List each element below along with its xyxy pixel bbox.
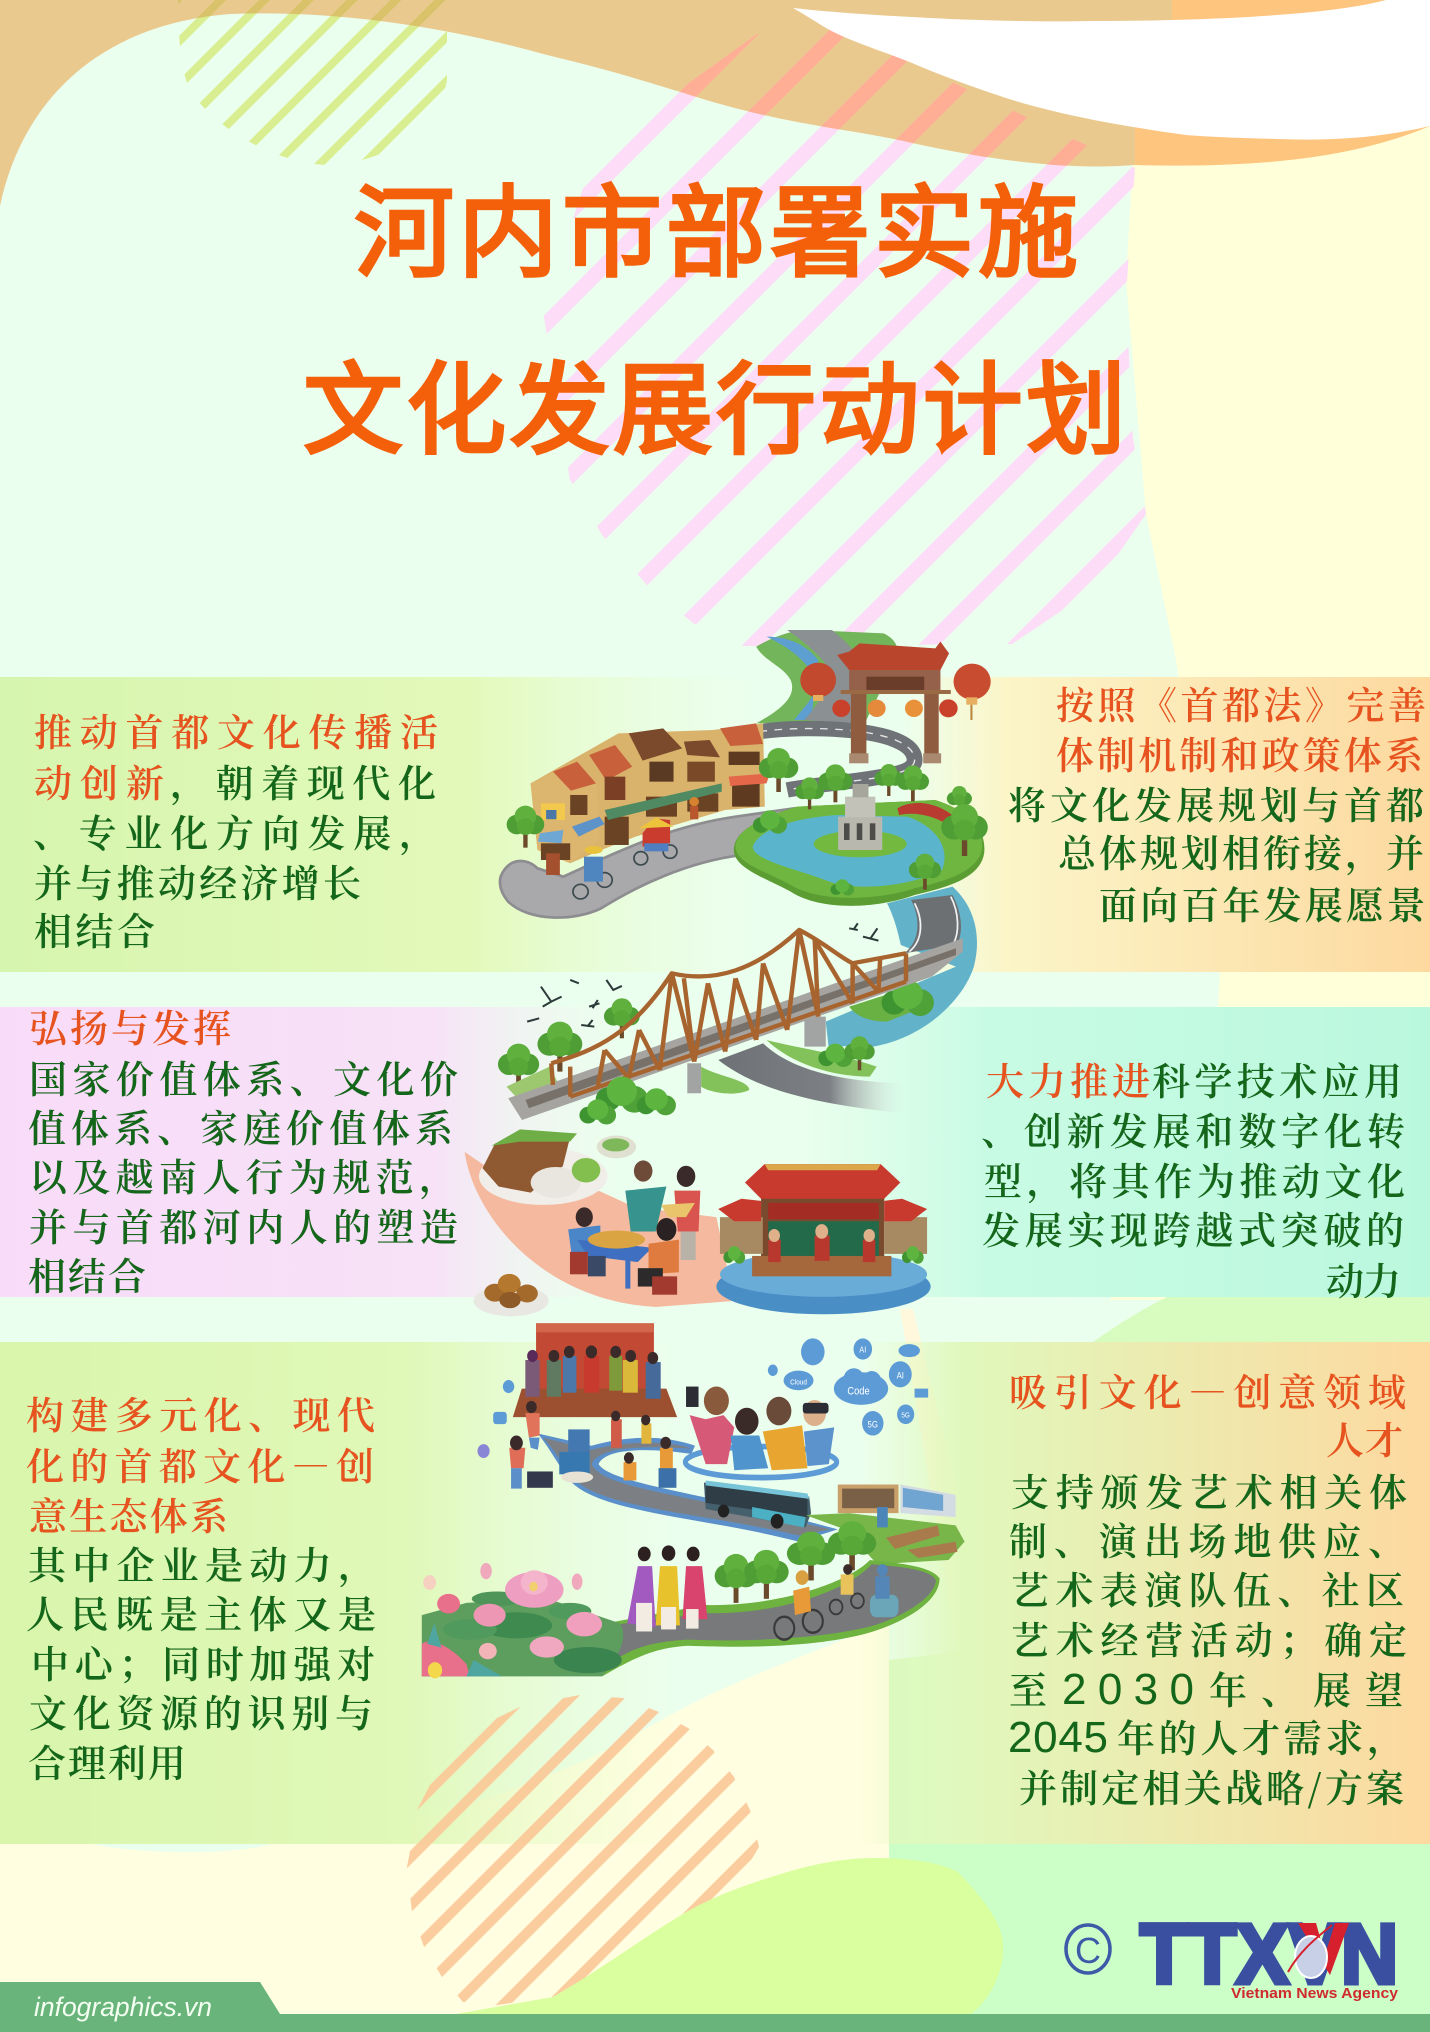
panel: promote cultural communication <box>0 677 760 972</box>
body text: cultural and creative talent: 年、展望 <box>1209 1660 1403 1715</box>
women in ao dai <box>627 1545 707 1631</box>
dancing children and tablets <box>509 1401 676 1489</box>
body text: promote national values: 相结合 <box>28 1246 146 1301</box>
hoan kiem lake with turtle tower <box>734 764 988 906</box>
long bien bridge <box>508 930 963 1120</box>
technology labels: 5G <box>868 1419 878 1430</box>
body text: promote cultural communication <box>33 753 437 956</box>
body text: science and technology: 发展实现跨越式突破的 <box>982 1200 1404 1255</box>
performance stage <box>513 1323 677 1417</box>
bridge piers <box>687 1017 826 1093</box>
body text: science and technology: 、创新发展和数字化转 <box>981 1101 1405 1156</box>
heading: capital law and institutions: 按照《首都法》完善 <box>1056 675 1426 730</box>
heading: promote cultural communication: 推动首都文化传播活 <box>34 702 438 757</box>
technology labels: AI <box>859 1345 866 1354</box>
lower road surface <box>609 1564 936 1664</box>
title: 河内市部署实施 <box>354 152 1078 297</box>
body text: science and technology: 型，将其作为推动文化 <box>984 1151 1405 1206</box>
body text: promote cultural communication: 相结合 <box>34 901 155 956</box>
panel: creative ecosystem <box>0 1342 680 1844</box>
body text: cultural and creative talent <box>1008 1462 1407 1813</box>
TTXVN wordmark: TTXVN <box>1140 1907 1398 2001</box>
river and road below lake <box>826 887 977 1047</box>
lotus flowers and leaves <box>422 1563 623 1678</box>
loop road <box>760 729 915 790</box>
cyclists and motorbike <box>774 1564 899 1640</box>
red V and globe <box>1288 1923 1349 1978</box>
peach food swoosh <box>465 1152 734 1307</box>
heading: creative ecosystem <box>26 1385 375 1541</box>
footer bar with infographics.vn tab <box>0 1982 1430 2032</box>
memorial gate with lanterns <box>800 642 991 763</box>
trees along road <box>715 1521 876 1603</box>
road and hill behind gate <box>756 630 897 723</box>
title <box>303 152 1126 474</box>
body text: creative ecosystem <box>26 1535 376 1788</box>
body text: cultural and creative talent: 艺术表演队伍、社区 <box>1011 1560 1404 1615</box>
illustration: old quarter, lake and long bien bridge <box>498 630 991 1124</box>
heading: capital law and institutions: 体制机制和政策体系 <box>1056 725 1423 780</box>
bushes below bridge <box>579 1077 676 1124</box>
body text: promote national values: 值体系、家庭价值体系 <box>28 1098 453 1153</box>
technology icons and cloud <box>477 1338 928 1458</box>
technology labels: AI <box>897 1370 904 1381</box>
body text: cultural and creative talent: 至 <box>1009 1660 1047 1715</box>
body text: promote cultural communication: ，朝着现代化 <box>170 753 436 808</box>
title: 文化发展行动计划 <box>303 329 1126 474</box>
riverside greenery <box>498 980 934 1103</box>
body text: science and technology: 动力 <box>1326 1251 1401 1306</box>
electric bus <box>704 1480 811 1529</box>
heading: creative ecosystem: 构建多元化、现代 <box>26 1385 375 1440</box>
panel: promote national values <box>0 998 620 1301</box>
body text: promote cultural communication: 、专业化方向发展， <box>33 803 437 858</box>
heading: promote cultural communication: 动创新 <box>34 753 164 808</box>
technology labels <box>790 1345 910 1430</box>
body text: cultural and creative talent: 2045 <box>1008 1713 1108 1762</box>
body text: cultural and creative talent: 艺术经营活动；确定 <box>1011 1610 1407 1665</box>
people on street: cyclist and cyclo <box>546 797 699 899</box>
body text: cultural and creative talent: 支持颁发艺术相关体 <box>1011 1462 1407 1517</box>
body text: promote national values: 并与首都河内人的塑造 <box>29 1197 458 1252</box>
body text: capital law and institutions: 总体规划相衔接，并 <box>1058 823 1424 878</box>
panel: science and technology <box>800 1007 1430 1306</box>
agency name: Vietnam News Agency <box>1231 1985 1399 2002</box>
panel: cultural and creative talent <box>860 1342 1430 1844</box>
food plates <box>474 1129 636 1316</box>
body text: creative ecosystem: 其中企业是动力， <box>28 1535 376 1590</box>
body text: creative ecosystem: 中心；同时加强对 <box>31 1634 375 1689</box>
body text: capital law and institutions: 将文化发展规划与首都 <box>1008 775 1424 830</box>
body text: science and technology <box>981 1051 1405 1306</box>
heading: cultural and creative talent: 人才 <box>1326 1410 1403 1465</box>
site name: infographics.vn <box>34 1992 212 2022</box>
water puppet stage <box>716 1164 931 1314</box>
heading: creative ecosystem: 意生态体系 <box>29 1486 228 1541</box>
body text: cultural and creative talent: 制、演出场地供应、 <box>1009 1511 1406 1566</box>
digital road <box>538 1434 838 1542</box>
TTXVN logo <box>1066 1907 1399 2002</box>
body text: promote cultural communication: 并与推动经济增长 <box>34 853 361 908</box>
birds <box>527 923 878 1027</box>
body text: creative ecosystem: 文化资源的识别与 <box>29 1683 373 1738</box>
lower road <box>602 1560 940 1676</box>
illustration: food, water puppets, performance, technology and street <box>422 1129 965 1678</box>
heading: capital law and institutions <box>1056 675 1426 780</box>
old quarter houses <box>531 723 770 863</box>
body text: cultural and creative talent: 年的人才需求， <box>1117 1708 1405 1763</box>
heading: creative ecosystem: 化的首都文化—创 <box>26 1436 374 1491</box>
body text: creative ecosystem: 人民既是主体又是 <box>26 1584 376 1639</box>
technology labels: 5G <box>901 1412 910 1420</box>
body text: cultural and creative talent: 2030 <box>1062 1665 1194 1714</box>
copyright mark <box>1066 1925 1110 1973</box>
panel: capital law and institutions <box>900 675 1430 972</box>
body text: promote national values: 以及越南人行为规范， <box>29 1147 457 1202</box>
lime blob and orange stripes <box>400 1690 1003 2014</box>
family at table <box>568 1160 700 1295</box>
group using devices <box>686 1387 834 1470</box>
technology labels: Cloud <box>790 1379 807 1387</box>
copyright mark: C <box>1075 1930 1101 1971</box>
heading: science and technology: 大力推进 <box>986 1051 1150 1106</box>
body text: capital law and institutions <box>1008 775 1425 930</box>
heading: promote national values: 弘扬与发挥 <box>29 998 231 1053</box>
body text: promote national values: 国家价值体系、文化价 <box>29 1049 458 1104</box>
technology labels: Code <box>847 1386 870 1398</box>
blue ring <box>685 1447 837 1478</box>
body text: creative ecosystem: 合理利用 <box>28 1733 186 1788</box>
heading: promote cultural communication <box>34 702 438 808</box>
body text: cultural and creative talent: 并制定相关战略/方案 <box>1019 1758 1404 1813</box>
body text: science and technology: 科学技术应用 <box>1152 1051 1402 1106</box>
body text: promote national values <box>28 1049 458 1301</box>
community garden and library <box>806 1485 965 1564</box>
heading: cultural and creative talent: 吸引文化—创意领域 <box>1009 1362 1406 1417</box>
street trees <box>507 748 798 848</box>
heading: cultural and creative talent <box>1009 1362 1406 1465</box>
body text: capital law and institutions: 面向百年发展愿景 <box>1099 875 1425 930</box>
old quarter street <box>500 808 794 918</box>
road under bridge <box>718 1043 904 1113</box>
